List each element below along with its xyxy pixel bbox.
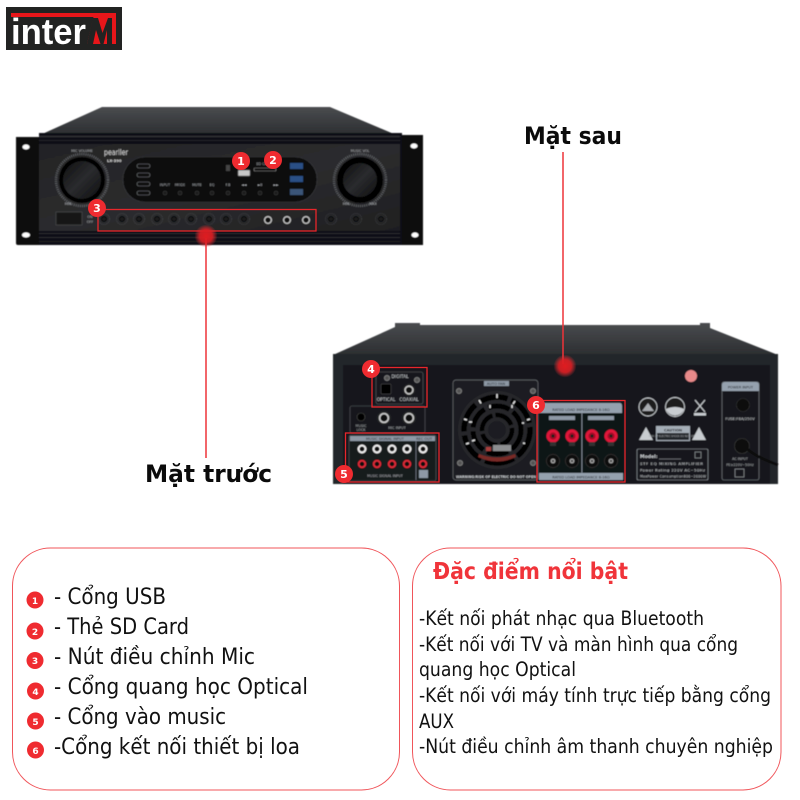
- SD card slot: [254, 162, 276, 171]
- display panel: ◄◄: [241, 183, 247, 187]
- badge 2: [264, 151, 282, 169]
- highlights text: -Kết nối với TV và màn hình qua cổng: [419, 633, 738, 656]
- badge 6: 6: [532, 399, 540, 412]
- input switch: OFF: [87, 220, 93, 224]
- music lock and mic input: LOCK: [356, 428, 366, 432]
- badge 4: 4: [367, 363, 375, 376]
- power input panel: AC INPUT: [732, 457, 749, 461]
- music signal input panel: MUSIC SIGNAL INPUT: [366, 437, 405, 441]
- speaker terminal panel: RATED LOAD IMPEDANCE 8-16Ω: [552, 476, 610, 480]
- badge 2: 2: [269, 154, 277, 167]
- arrow: front pointer line: [194, 224, 218, 458]
- highlights frame: [412, 548, 781, 790]
- legend item 3: 3: [32, 657, 38, 667]
- highlights text: -Kết nối phát nhạc qua Bluetooth: [419, 607, 704, 630]
- legend item 4: - Cổng quang học Optical: [54, 675, 308, 700]
- legend item 2: - Thẻ SD Card: [54, 615, 189, 640]
- model label: Model:: [640, 454, 658, 460]
- panel: rear view of amplifier: [333, 323, 778, 484]
- fan panel: WARNING:RISK OF ELECTRIC DO NOT OPEN: [456, 474, 536, 479]
- heading: rear: Mặt sau: [524, 122, 622, 150]
- badge 1: [232, 152, 250, 170]
- music volume knob: MAX: [369, 202, 377, 206]
- display panel: MUTE: [192, 183, 202, 187]
- highlights heading: Đặc điểm nổi bật: [433, 557, 628, 585]
- rear face: [333, 354, 778, 484]
- left rack ear: [16, 137, 40, 245]
- digital input panel: DIGITAL: [391, 374, 409, 380]
- legend item 6: 6: [32, 747, 39, 757]
- display panel: EQ: [210, 183, 215, 187]
- power input panel: FUSE:F8A/250V: [725, 416, 755, 421]
- legend item 1: 1: [32, 597, 38, 607]
- badge 5: 5: [340, 468, 348, 481]
- legend item 5: - Cổng vào music: [54, 705, 226, 730]
- music volume knob: MIN: [343, 202, 350, 206]
- caution label: RISK OF ELECTRIC SHOCK DO NOT OPEN: [649, 435, 698, 438]
- input switch: [56, 212, 93, 225]
- badge 3: 3: [93, 202, 101, 215]
- music signal input panel: [349, 435, 436, 481]
- brand label: pearller: [104, 148, 129, 157]
- badge 1: 1: [237, 155, 245, 168]
- callout box 4: digital inputs: [372, 368, 427, 407]
- brand label: [104, 148, 129, 163]
- power input panel: PE≥220V~50Hz: [726, 463, 754, 467]
- fan panel: AUTO FAN: [487, 382, 505, 386]
- display panel: ►II: [258, 183, 262, 187]
- mic volume knob: [56, 149, 108, 206]
- model label: STF EQ MIXING AMPLIFIER: [640, 461, 703, 466]
- highlights text: [419, 607, 773, 758]
- front face: [39, 133, 402, 245]
- legend item 4: 4: [32, 688, 39, 698]
- model label: MaxPower Consumption800~2000W: [640, 474, 707, 478]
- legend item 1: - Cổng USB: [54, 585, 166, 610]
- heading: front: Mặt trước: [145, 460, 272, 488]
- music lock and mic input: [350, 406, 425, 433]
- logo: InterM: inter: [11, 11, 86, 52]
- SD card slot: SD CARD: [256, 162, 272, 166]
- music lock and mic input: MIC INPUT: [388, 426, 407, 430]
- legend item 5: 5: [32, 718, 39, 728]
- fan panel: [453, 380, 538, 480]
- sticker: [685, 370, 697, 382]
- panel: port legend: [12, 548, 400, 790]
- USB port: [238, 170, 250, 176]
- mic volume knob: MIC VOLUME: [71, 149, 93, 153]
- music lock and mic input: MUSIC: [356, 424, 367, 428]
- panel: highlights: [412, 548, 781, 790]
- badge 3: [88, 199, 106, 217]
- digital input panel: OPTICAL: [377, 397, 396, 403]
- speaker terminal panel: RATED LOAD IMPEDANCE 8-16Ω: [552, 408, 610, 412]
- digital input panel: COAXIAL: [399, 397, 419, 403]
- legend item 3: - Nút điều chỉnh Mic: [54, 645, 255, 670]
- input switch: ON: [87, 215, 93, 219]
- music signal input panel: MUSIC SIGNAL INPUT: [367, 474, 404, 478]
- music volume knob: [334, 149, 386, 206]
- amplifier top cover: [40, 107, 394, 135]
- display panel: INPUT: [160, 183, 171, 187]
- certification icons: [639, 398, 706, 416]
- right rack ear: [402, 135, 423, 245]
- legend frame: [12, 548, 400, 790]
- panel: front view of amplifier: [16, 107, 423, 245]
- power input panel: [722, 382, 778, 480]
- display panel: MODE: [175, 183, 185, 187]
- badge 5: [335, 465, 353, 483]
- model label: [637, 449, 708, 480]
- speaker terminal panel: [539, 402, 623, 480]
- display panel: ►►: [273, 183, 279, 187]
- logo: InterM: [6, 7, 122, 52]
- callout box 6: speaker outputs: [537, 400, 625, 482]
- caution label: CAUTION: [664, 428, 682, 432]
- arrow: rear pointer line: [554, 152, 576, 378]
- display panel: [123, 157, 317, 202]
- power input panel: POWER INPUT: [728, 386, 754, 390]
- fan grille: [458, 391, 536, 469]
- music signal input panel: REC OUT: [416, 437, 433, 441]
- callout box 3: mic controls: [98, 210, 316, 231]
- legend item 6: -Cổng kết nối thiết bị loa: [54, 735, 300, 760]
- highlights text: AUX: [419, 710, 454, 733]
- display panel: F.B: [226, 183, 231, 187]
- caution label: [639, 426, 706, 441]
- rear top cover: [333, 323, 778, 355]
- legend item 2: 2: [32, 628, 38, 638]
- brand label: LX-390: [107, 158, 122, 163]
- callout box 5: music input: [346, 433, 439, 482]
- bluetooth and input icons: [290, 163, 303, 195]
- highlights text: quang học Optical: [419, 658, 576, 681]
- control knob row: [98, 213, 387, 225]
- music volume knob: MUSIC VOL: [351, 149, 370, 153]
- badge 6: [527, 396, 545, 414]
- badge 4: [362, 360, 380, 378]
- model label: Power Rating 220V AC~50Hz: [640, 468, 705, 472]
- digital input panel: [376, 372, 423, 404]
- mic volume knob: MIN: [65, 202, 72, 206]
